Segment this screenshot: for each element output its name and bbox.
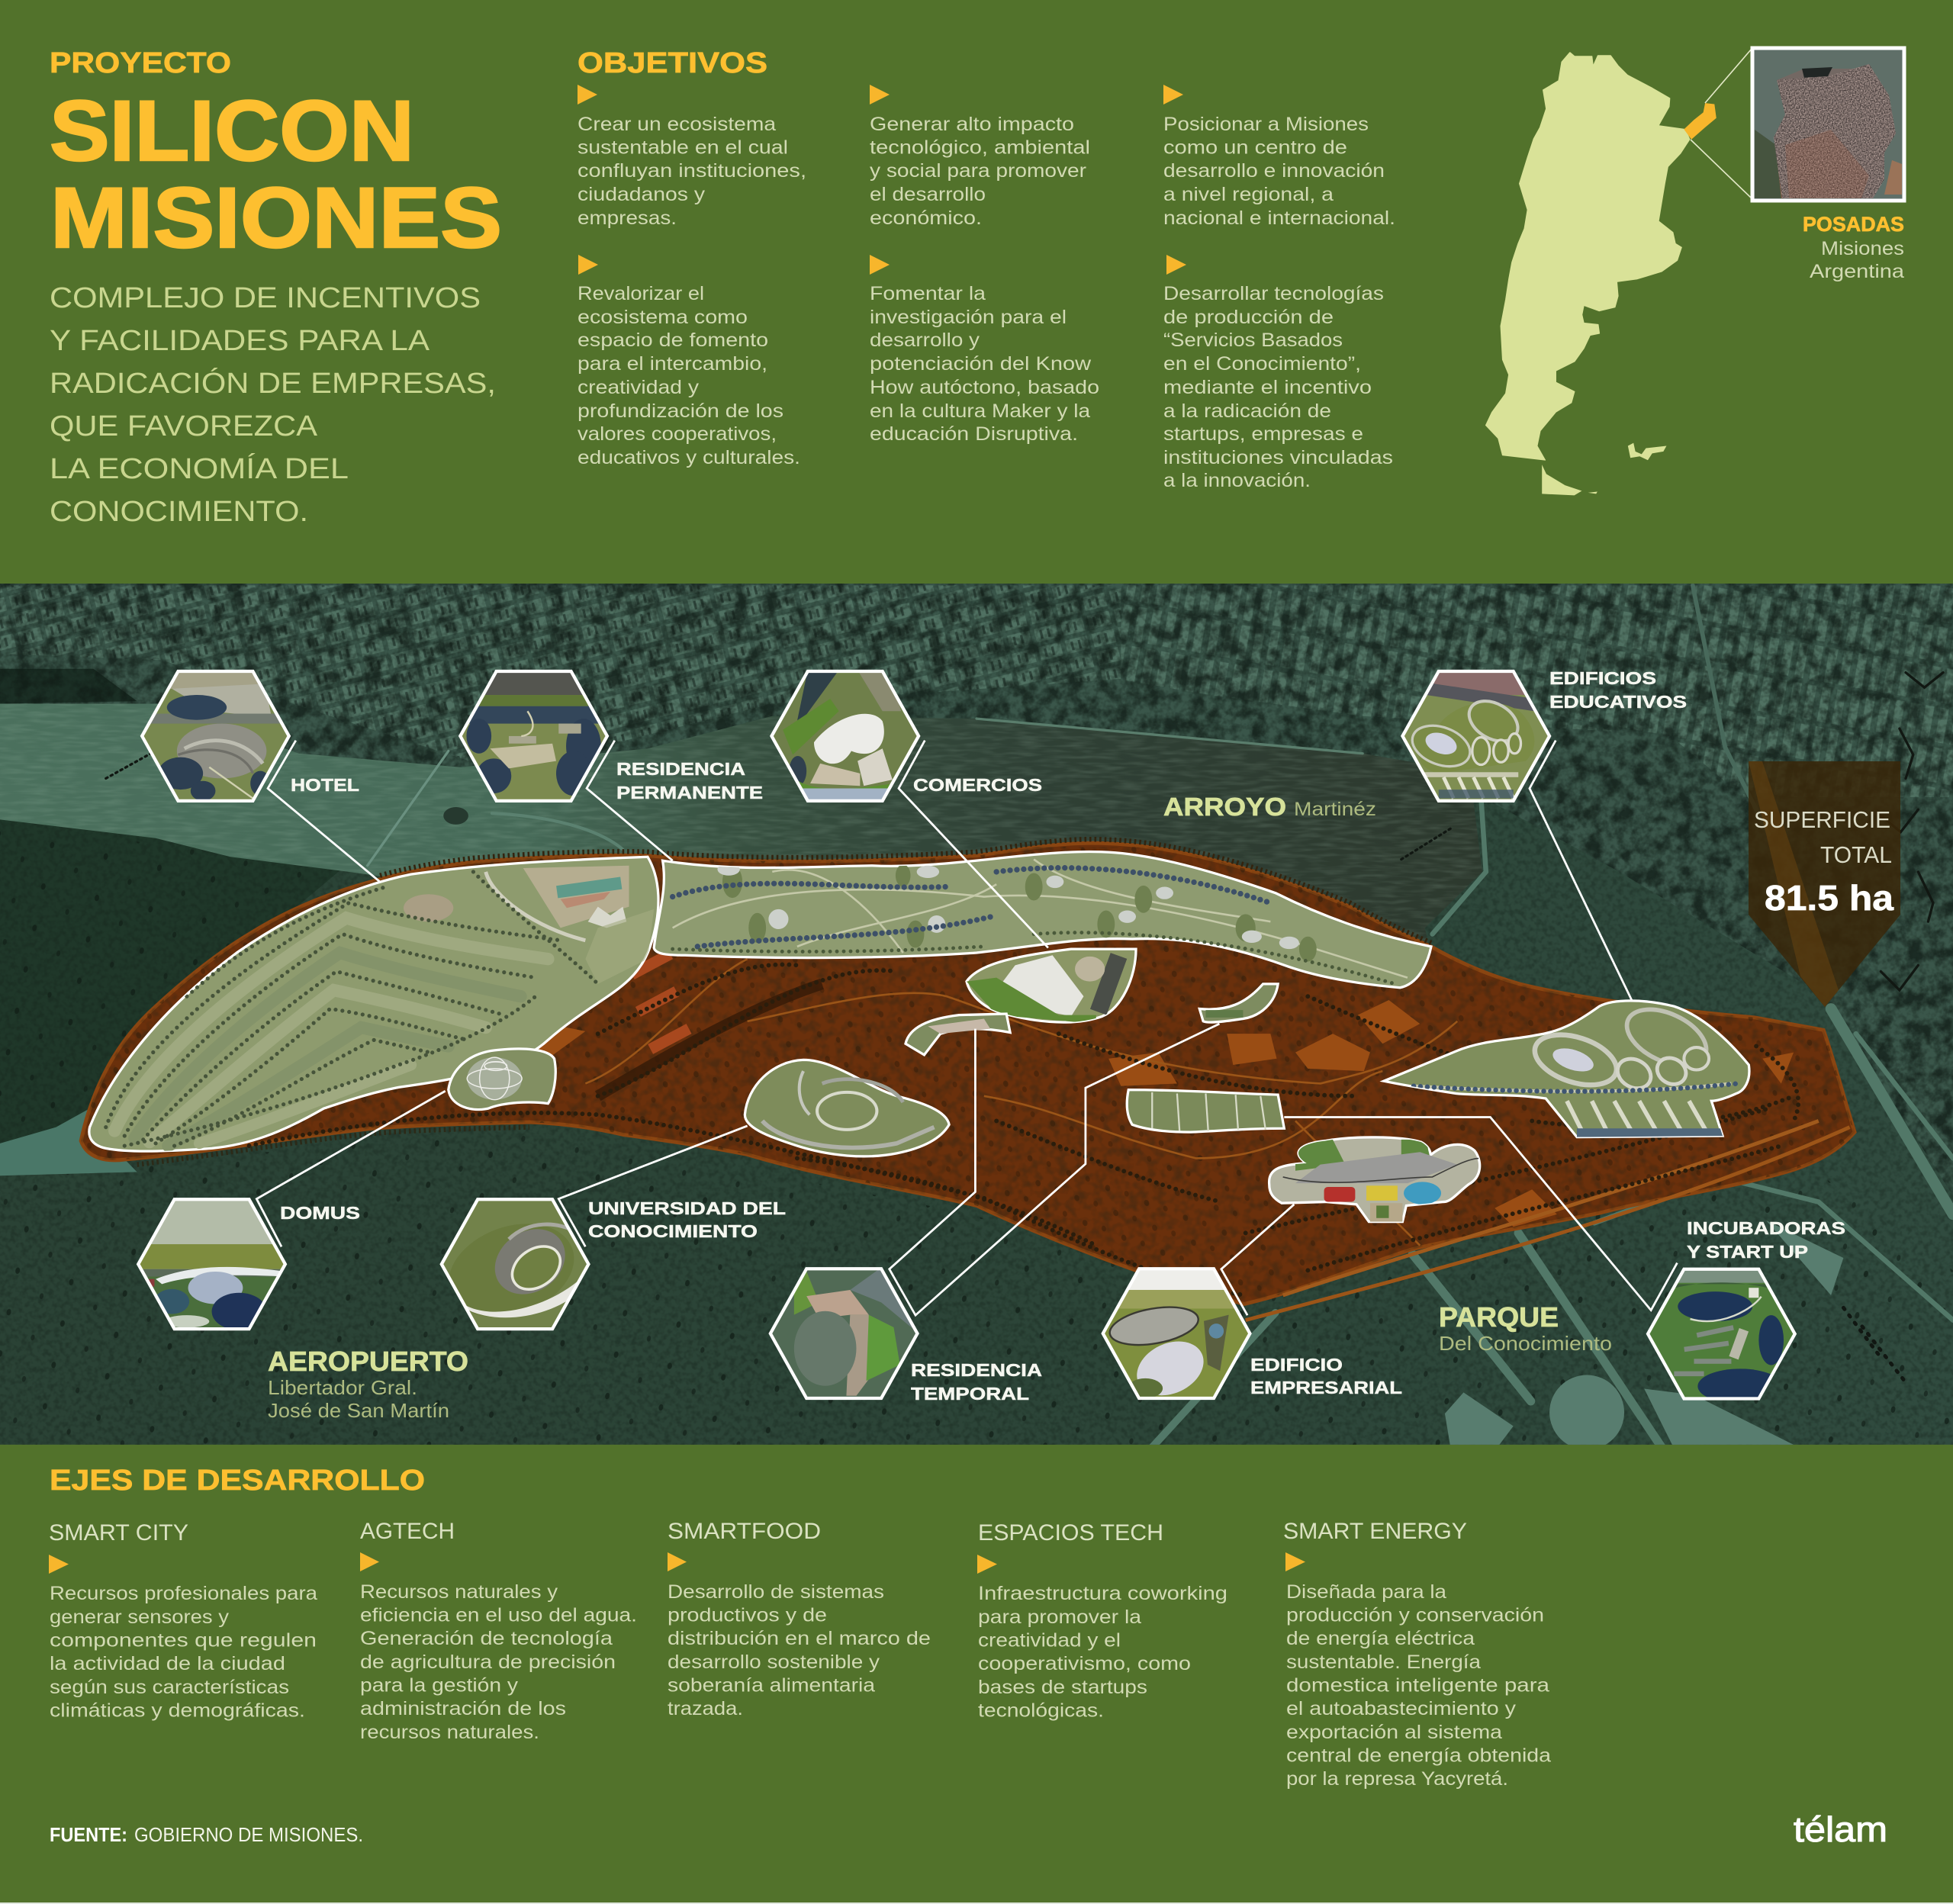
objective 3 bbox=[1163, 85, 1395, 229]
city blocks east bbox=[1121, 585, 1953, 797]
light service buildings bbox=[1445, 1221, 1843, 1451]
objective 5: Fomentar la bbox=[870, 283, 986, 304]
label: aeropuerto: José de San Martín bbox=[268, 1399, 449, 1422]
column: smartfood: productivos y de bbox=[668, 1605, 827, 1626]
column: smart energy: sustentable. Energía bbox=[1286, 1652, 1481, 1673]
column: smartfood: trazada. bbox=[668, 1698, 743, 1719]
column: smart energy: SMART ENERGY bbox=[1283, 1519, 1467, 1544]
callout line: edificios educativos bbox=[1530, 741, 1632, 1000]
objective 5: investigación para el bbox=[870, 307, 1067, 328]
column: smart city: SMART CITY bbox=[49, 1520, 188, 1545]
callout line: universidad bbox=[558, 1126, 748, 1246]
objective 5: educación Disruptiva. bbox=[870, 423, 1078, 445]
objective 4: educativos y culturales. bbox=[578, 447, 800, 468]
site area: orange footprint bbox=[75, 839, 1856, 1320]
objective 4: para el intercambio, bbox=[578, 353, 767, 375]
zone: residencia permanente bbox=[654, 851, 1431, 988]
column: agtech: Recursos naturales y bbox=[360, 1581, 558, 1603]
label: parque del conocimiento: Del Conocimiento bbox=[1439, 1332, 1612, 1355]
callout line: domus bbox=[256, 1091, 446, 1246]
objective 2: tecnológico, ambiental bbox=[870, 137, 1090, 159]
column: agtech: Generación de tecnología bbox=[360, 1628, 613, 1649]
project site and zones bbox=[75, 670, 1943, 1406]
project title block bbox=[50, 47, 502, 265]
column: smart energy: domestica inteligente para bbox=[1286, 1675, 1549, 1697]
aerial texture overlay bbox=[0, 584, 1953, 1445]
column: espacios tech: ESPACIOS TECH bbox=[978, 1520, 1163, 1545]
objective 4: creatividad y bbox=[578, 377, 700, 398]
objective 4: ecosistema como bbox=[578, 307, 748, 328]
column: smartfood: distribución en el marco de bbox=[668, 1628, 931, 1649]
zone: residencia temporal second arc bbox=[1199, 984, 1278, 1022]
objective 1: empresas. bbox=[578, 207, 677, 229]
objective 3: desarrollo e innovación bbox=[1163, 160, 1385, 182]
label: universidad del conocimiento: CONOCIMIENTO bbox=[588, 1221, 758, 1241]
objective 6 bbox=[1163, 255, 1393, 491]
objective 2 bbox=[870, 85, 1090, 229]
callout: superficie total flag: SUPERFICIE bbox=[1754, 806, 1890, 833]
label: edificios educativos: EDUCATIVOS bbox=[1549, 692, 1687, 712]
label: residencia permanente: PERMANENTE bbox=[616, 783, 763, 802]
column: espacios tech: tecnológicas. bbox=[978, 1700, 1104, 1721]
objective 1: ciudadanos y bbox=[578, 184, 706, 205]
column: smart city: generar sensores y bbox=[50, 1606, 230, 1628]
objective 6: en el Conocimiento”, bbox=[1163, 353, 1361, 375]
site: tree rows bbox=[249, 964, 1798, 1295]
label: Posadas: Misiones bbox=[1821, 238, 1904, 259]
photo hexagon: edificio empresarial bbox=[1102, 1268, 1251, 1406]
column: agtech: de agricultura de precisión bbox=[360, 1652, 616, 1673]
label: arroyo Martinez: Martinéz bbox=[1294, 799, 1376, 820]
column: smartfood: soberanía alimentaria bbox=[668, 1675, 875, 1697]
photo hexagon: comercios bbox=[771, 670, 920, 803]
label: universidad del conocimiento: UNIVERSIDAD DEL bbox=[588, 1198, 786, 1218]
site: lighter plazas bbox=[510, 949, 1794, 1227]
objective 1: confluyan instituciones, bbox=[578, 160, 806, 182]
label: parque del conocimiento: PARQUE bbox=[1439, 1301, 1559, 1333]
river: arroyo Martinez bbox=[0, 687, 1495, 961]
photo hexagon: residencia permanente bbox=[459, 670, 609, 802]
column: agtech bbox=[360, 1519, 637, 1743]
objective 1: Crear un ecosistema bbox=[578, 114, 776, 135]
objective 4: espacio de fomento bbox=[578, 330, 768, 351]
column: smart city: Recursos profesionales para bbox=[50, 1583, 317, 1604]
objective 4: Revalorizar el bbox=[578, 283, 704, 304]
zone: incubadoras y start up bbox=[1127, 1090, 1284, 1132]
label: residencia temporal: RESIDENCIA bbox=[911, 1360, 1042, 1380]
lower left forest bbox=[0, 819, 349, 1152]
river mouth bbox=[0, 1108, 137, 1176]
objective 2: el desarrollo bbox=[870, 184, 986, 205]
label: residencia temporal bbox=[911, 1360, 1042, 1404]
callout lines: locator to inset bbox=[1691, 49, 1752, 198]
objective 5 bbox=[870, 255, 1099, 445]
callout line: hotel bbox=[268, 741, 380, 882]
objective 1 bbox=[578, 85, 806, 229]
project title block: MISIONES bbox=[50, 170, 502, 265]
label: aeropuerto: Libertador Gral. bbox=[268, 1376, 417, 1399]
subtitle text: LA ECONOMÍA DEL bbox=[50, 452, 349, 485]
subtitle text: QUE FAVOREZCA bbox=[50, 410, 318, 442]
objective 5: en la cultura Maker y la bbox=[870, 400, 1090, 422]
callout line: residencia permanente bbox=[587, 741, 673, 860]
label: residencia permanente bbox=[616, 759, 763, 802]
column: smart energy bbox=[1283, 1519, 1551, 1790]
label: edificios educativos bbox=[1549, 668, 1687, 712]
subtitle text: RADICACIÓN DE EMPRESAS, bbox=[50, 367, 496, 400]
column: espacios tech: para promover la bbox=[978, 1606, 1141, 1628]
column: smart city bbox=[49, 1520, 317, 1721]
objective 5: desarrollo y bbox=[870, 330, 980, 351]
label: residencia temporal: TEMPORAL bbox=[911, 1384, 1029, 1404]
label: hotel: HOTEL bbox=[291, 775, 359, 795]
label: universidad del conocimiento bbox=[588, 1198, 786, 1241]
site: scattered dark trees bbox=[75, 847, 1856, 1307]
photo hexagon: universidad bbox=[436, 1198, 590, 1333]
column: agtech: para la gestión y bbox=[360, 1675, 519, 1697]
logo: telam: télam bbox=[1794, 1809, 1887, 1849]
label: incubadoras y start up: Y START UP bbox=[1687, 1242, 1808, 1262]
column: smart energy: por la represa Yacyretá. bbox=[1286, 1768, 1508, 1790]
column: agtech: AGTECH bbox=[360, 1519, 455, 1544]
label: edificio empresarial bbox=[1250, 1355, 1402, 1397]
objective 6: Desarrollar tecnologías bbox=[1163, 283, 1384, 304]
birds bbox=[106, 673, 1943, 1382]
label: domus: DOMUS bbox=[280, 1203, 360, 1223]
objective 3: nacional e internacional. bbox=[1163, 207, 1395, 229]
heading: objetivos: OBJETIVOS bbox=[578, 47, 767, 79]
column: smart energy: central de energía obtenida bbox=[1286, 1745, 1551, 1767]
objective 6: instituciones vinculadas bbox=[1163, 447, 1393, 468]
heading: ejes de desarrollo: EJES DE DESARROLLO bbox=[50, 1465, 425, 1497]
site: dark tree corridor bbox=[598, 984, 822, 1096]
label: parque del conocimiento bbox=[1439, 1301, 1612, 1355]
objective 6: de producción de bbox=[1163, 307, 1334, 328]
callout line: comercios bbox=[899, 741, 1048, 947]
objective 3: Posicionar a Misiones bbox=[1163, 114, 1369, 135]
photo hexagon: hotel bbox=[140, 670, 290, 802]
dark bank strip bbox=[0, 669, 137, 703]
objective 6: a la radicación de bbox=[1163, 400, 1331, 422]
source note: GOBIERNO DE MISIONES. bbox=[134, 1823, 363, 1846]
column: smart energy: Diseñada para la bbox=[1286, 1581, 1446, 1603]
subtitle text: COMPLEJO DE INCENTIVOS bbox=[50, 282, 481, 314]
zone: edificio empresarial bbox=[1269, 1137, 1480, 1223]
zone: hotel area bbox=[89, 857, 658, 1151]
label: aeropuerto: AEROPUERTO bbox=[268, 1346, 468, 1377]
scattered trees on land bbox=[0, 822, 1953, 1445]
subtitle text: CONOCIMIENTO. bbox=[50, 496, 308, 528]
column: agtech: recursos naturales. bbox=[360, 1722, 539, 1743]
project title block: SILICON bbox=[50, 83, 414, 178]
column: smart energy: el autoabastecimiento y bbox=[1286, 1698, 1517, 1719]
site: internal roads bbox=[585, 959, 1850, 1320]
column: smart energy: exportación al sistema bbox=[1286, 1722, 1502, 1743]
column: smartfood bbox=[668, 1519, 931, 1719]
objective 4 bbox=[578, 255, 800, 468]
label: comercios: COMERCIOS bbox=[913, 775, 1042, 795]
column: smart city: según sus características bbox=[50, 1677, 289, 1698]
label: edificio empresarial: EDIFICIO bbox=[1250, 1355, 1343, 1375]
column: espacios tech bbox=[977, 1520, 1227, 1721]
column: smart energy: producción y conservación bbox=[1286, 1605, 1544, 1626]
subtitle text: Y FACILIDADES PARA LA bbox=[50, 325, 430, 357]
label: incubadoras y start up bbox=[1687, 1218, 1845, 1262]
objective 6: mediante el incentivo bbox=[1163, 377, 1372, 398]
subtitle text bbox=[50, 282, 496, 528]
callout: superficie total flag bbox=[1749, 761, 1900, 1007]
zone: domus bbox=[449, 1049, 555, 1109]
objective 3: como un centro de bbox=[1163, 137, 1347, 159]
label: Posadas bbox=[1803, 213, 1904, 282]
label: Posadas: Argentina bbox=[1810, 261, 1904, 282]
column: smart city: la actividad de la ciudad bbox=[50, 1653, 285, 1674]
label: incubadoras y start up: INCUBADORAS bbox=[1687, 1218, 1845, 1238]
column: smartfood: SMARTFOOD bbox=[668, 1519, 821, 1544]
column: smart energy: de energía eléctrica bbox=[1286, 1628, 1475, 1649]
column: smartfood: Desarrollo de sistemas bbox=[668, 1581, 884, 1603]
column: espacios tech: Infraestructura coworking bbox=[978, 1583, 1227, 1604]
objective 6: a la innovación. bbox=[1163, 470, 1311, 491]
column: espacios tech: creatividad y el bbox=[978, 1629, 1121, 1651]
site: mottled ground bbox=[75, 847, 1856, 1307]
city area at the top bbox=[0, 583, 1953, 1195]
column: agtech: administración de los bbox=[360, 1698, 566, 1719]
source note: FUENTE: bbox=[50, 1823, 127, 1846]
column: espacios tech: cooperativismo, como bbox=[978, 1653, 1191, 1674]
site: dark edge trees bbox=[380, 839, 1431, 943]
objective 5: potenciación del Know bbox=[870, 353, 1092, 375]
roads and ground-level structures bbox=[0, 585, 1953, 1451]
objective 2: y social para promover bbox=[870, 160, 1086, 182]
callout: superficie total flag: 81.5 ha bbox=[1765, 878, 1893, 918]
label: arroyo Martinez: ARROYO bbox=[1163, 793, 1286, 821]
photo hexagon: incubadoras bbox=[1646, 1268, 1796, 1404]
photo hexagon: edificios educativos bbox=[1401, 670, 1551, 802]
column: smart city: componentes que regulen bbox=[50, 1629, 317, 1651]
callout line: edificio empresarial bbox=[1221, 1204, 1294, 1315]
photo hexagon: residencia temporal bbox=[769, 1268, 919, 1400]
column: espacios tech: bases de startups bbox=[978, 1677, 1147, 1698]
callout line: residencia temporal bbox=[890, 1024, 1219, 1315]
objective 6: “Servicios Basados bbox=[1163, 330, 1343, 351]
label: Posadas: POSADAS bbox=[1803, 213, 1904, 236]
column: smartfood: desarrollo sostenible y bbox=[668, 1652, 880, 1673]
objective 6: startups, empresas e bbox=[1163, 423, 1363, 445]
zone: edificios educativos bbox=[1384, 998, 1749, 1137]
label: edificio empresarial: EMPRESARIAL bbox=[1250, 1378, 1402, 1397]
map: Argentina locator bbox=[1486, 53, 1717, 495]
objective 2: económico. bbox=[870, 207, 982, 229]
aerial map background bbox=[0, 583, 1953, 1445]
zone: comercios bbox=[967, 949, 1136, 1024]
column: agtech: eficiencia en el uso del agua. bbox=[360, 1605, 637, 1626]
city blocks bbox=[0, 585, 1121, 762]
callout line: incubadoras bbox=[1284, 1118, 1677, 1311]
objective 4: profundización de los bbox=[578, 400, 783, 422]
objective 3: a nivel regional, a bbox=[1163, 184, 1334, 205]
objective 5: How autóctono, basado bbox=[870, 377, 1099, 398]
label: edificios educativos: EDIFICIOS bbox=[1549, 668, 1656, 688]
project title block: PROYECTO bbox=[50, 47, 231, 79]
inset: satellite view of Posadas bbox=[1752, 48, 1904, 201]
objective 2: Generar alto impacto bbox=[870, 114, 1074, 135]
label: arroyo Martinez bbox=[1163, 793, 1376, 821]
zone: universidad del conocimiento bbox=[745, 1060, 949, 1156]
zone: residencia temporal arc bbox=[906, 1014, 1010, 1055]
objective 1: sustentable en el cual bbox=[578, 137, 788, 159]
callout: superficie total flag: TOTAL bbox=[1820, 841, 1892, 868]
label: residencia permanente: RESIDENCIA bbox=[616, 759, 745, 779]
objective 4: valores cooperativos, bbox=[578, 423, 777, 445]
column: smart city: climáticas y demográficas. bbox=[50, 1700, 305, 1721]
photo hexagon: domus bbox=[137, 1198, 287, 1331]
label: aeropuerto bbox=[268, 1346, 468, 1422]
source note bbox=[50, 1823, 363, 1846]
